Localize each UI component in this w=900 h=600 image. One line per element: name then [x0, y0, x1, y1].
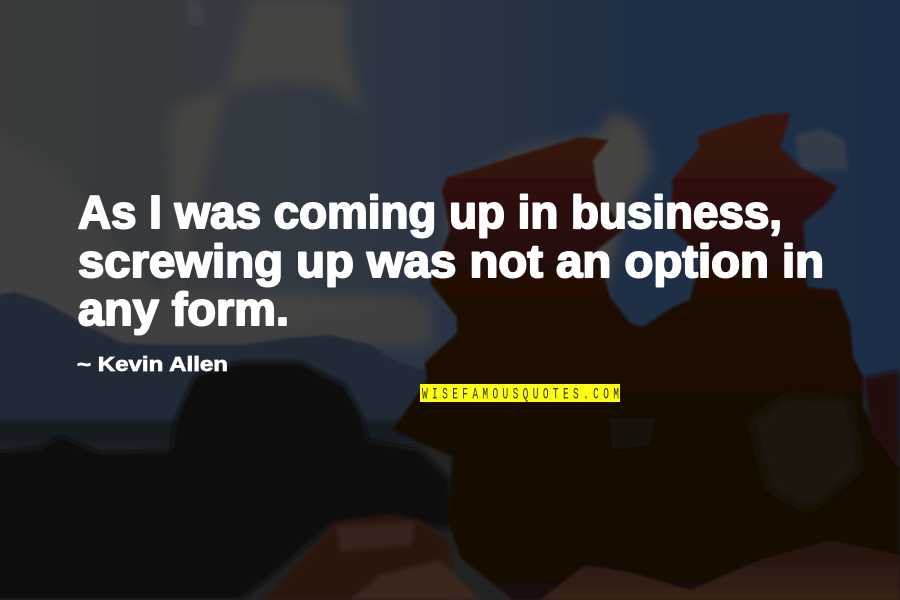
quote line 3: any form. [78, 283, 289, 335]
author attribution: ~ Kevin Allen [77, 354, 228, 376]
background: sky [0, 0, 900, 440]
cloud [170, 0, 652, 320]
quote line 2: screwing up was not an option in [78, 235, 824, 287]
quote text [78, 186, 824, 335]
trees [0, 362, 450, 600]
rock formation [393, 113, 900, 600]
distant mountains [0, 292, 440, 445]
foreground rocks and ground [262, 514, 480, 600]
watermark badge: WISEFAMOUSQUOTES.COM [422, 385, 619, 403]
quote line 1: As I was coming up in business, [78, 186, 782, 238]
